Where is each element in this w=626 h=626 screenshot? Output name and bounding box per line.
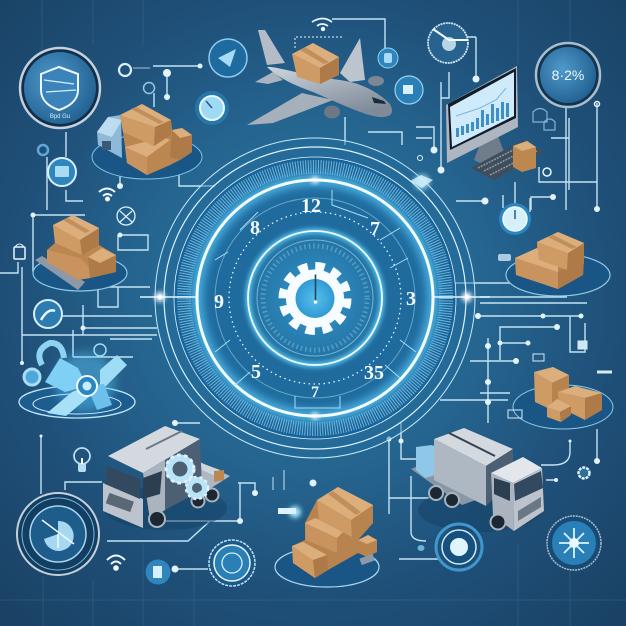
wifi icon bottom <box>107 556 125 570</box>
truck right <box>411 428 544 532</box>
numeral 9: 9 <box>214 291 224 313</box>
shield badge <box>20 48 100 128</box>
box cluster: bottom center <box>275 487 379 587</box>
ring node right <box>543 102 600 176</box>
wifi icon top with dashed link <box>295 18 342 48</box>
small box <box>547 407 561 422</box>
upper box <box>537 242 568 270</box>
dial icon bottom <box>209 540 255 586</box>
parcel on airplane <box>292 54 320 84</box>
mid box <box>305 523 337 553</box>
depot icon <box>97 115 122 158</box>
flatbed with parcel <box>190 462 230 495</box>
compass icon top <box>209 39 247 77</box>
box cluster: right mid <box>513 367 613 429</box>
dial segments <box>215 190 416 408</box>
clock icon top <box>195 91 229 125</box>
right box <box>170 128 192 160</box>
network node icon <box>117 207 135 225</box>
box cluster: left <box>33 215 127 291</box>
wheels <box>429 486 506 530</box>
shield badge: Bpd Gu <box>50 114 70 120</box>
blue round icon bottom <box>146 560 170 584</box>
keyboard <box>471 140 544 180</box>
top box <box>53 225 82 255</box>
cab <box>491 457 542 483</box>
round icon left <box>34 300 62 328</box>
monitor chart <box>456 102 509 137</box>
small ring icons <box>38 145 76 186</box>
lock node at left <box>14 244 25 259</box>
wifi icon left <box>99 188 115 200</box>
flatbed with blue load <box>411 459 490 505</box>
numeral 8: 8 <box>250 217 260 239</box>
numeral 5: 5 <box>251 361 261 383</box>
ghost icon near monitor <box>533 108 555 130</box>
compass badge bottom right <box>547 516 601 570</box>
lower box <box>125 147 147 175</box>
bottom center glow node <box>273 470 301 518</box>
clock dial <box>155 138 475 458</box>
wheels <box>149 488 218 527</box>
lower box <box>515 258 558 289</box>
stack silhouette <box>120 104 192 175</box>
numeral 7 top right: 7 <box>370 218 380 240</box>
stack silhouette <box>292 487 373 578</box>
small box <box>88 248 116 278</box>
box cluster: top left <box>92 104 202 179</box>
pie badge bottom left <box>17 493 99 575</box>
numeral 35: 35 <box>364 362 384 384</box>
numeral 3: 3 <box>406 288 416 310</box>
inner ring and gear <box>247 230 383 366</box>
wide box <box>558 392 585 420</box>
truck left <box>103 426 230 530</box>
tall box <box>534 372 552 410</box>
small gear icon right <box>578 468 590 478</box>
percentage badge: 8·2% <box>552 67 584 83</box>
cargo box <box>434 428 513 466</box>
cab <box>103 483 143 528</box>
logo node right of plane <box>378 48 398 68</box>
conveyor <box>35 256 85 290</box>
numeral 12: 12 <box>301 195 321 217</box>
lower box <box>47 250 90 280</box>
stack silhouette <box>47 215 116 280</box>
clock icon right <box>499 203 531 235</box>
tick hatch ring <box>184 167 446 429</box>
airplane <box>247 30 392 125</box>
bulb icon <box>74 448 90 472</box>
device node near dial <box>410 156 433 190</box>
parcel by keyboard <box>513 141 536 172</box>
top box <box>120 115 155 146</box>
box cluster: right top <box>506 232 610 296</box>
stack silhouette <box>515 232 584 289</box>
numeral 7 bottom: 7 <box>311 384 319 401</box>
turbine machine <box>19 343 135 418</box>
monitor <box>446 66 544 180</box>
cargo body <box>108 426 200 473</box>
gear icon <box>282 266 348 331</box>
ring icon right of plane <box>395 76 423 104</box>
low box <box>292 546 315 578</box>
percentage badge <box>536 43 600 107</box>
truck gears <box>169 458 191 480</box>
light flares <box>140 158 490 440</box>
at-sign icon <box>119 64 154 94</box>
main glowing ring <box>197 180 433 416</box>
bubble icon bottom <box>418 524 482 570</box>
small tag top right dial <box>498 254 511 261</box>
side box <box>358 535 377 557</box>
gauge top <box>428 23 468 63</box>
document tags right <box>508 341 612 418</box>
top box <box>317 500 352 537</box>
